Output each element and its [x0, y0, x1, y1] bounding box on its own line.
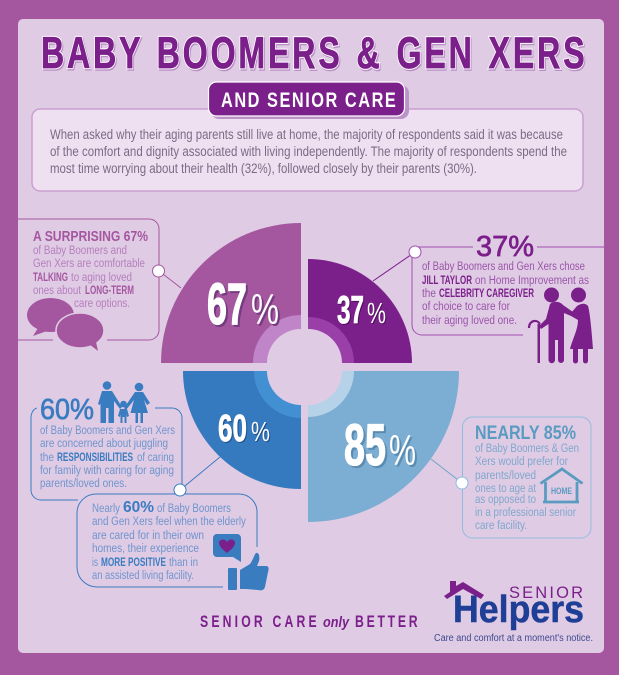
tagline — [200, 613, 418, 632]
icon: heart chat bubble — [213, 534, 241, 562]
icon: home: HOME — [551, 486, 572, 496]
subtitle pill — [208, 82, 409, 119]
chart: quarter pie — [161, 223, 459, 522]
callout: 60% more positive: is — [92, 555, 98, 569]
callout: 60% more positive: of Baby Boomers — [157, 501, 231, 515]
icon: speech bubbles — [27, 298, 104, 351]
segment: 60%: % — [251, 416, 270, 447]
icon: home — [540, 469, 582, 502]
callout: 60% responsibilities: RESPONSIBILITIES — [57, 450, 133, 464]
callout: 85% age at home: parents/loved — [475, 468, 536, 482]
callout: 37% celebrity caregiver — [373, 231, 604, 364]
callout: 60% more positive: homes, their experience — [92, 541, 199, 555]
segment: 37%: % — [368, 299, 387, 331]
callout: 60% more positive: MORE POSITIVE — [101, 555, 166, 569]
callout: 67% talking: care options. — [74, 296, 130, 310]
callout: 60% responsibilities: the — [40, 450, 54, 464]
callout: 60% responsibilities: 60% — [40, 394, 94, 426]
segment: 60%: 60 — [218, 408, 247, 450]
callout: 60% responsibilities: for family with caring for aging — [40, 463, 174, 477]
segment: 60%: 60 — [219, 409, 248, 451]
segment: 67%: 67 — [209, 274, 249, 339]
title: BABY BOOMERS & GEN XERS — [42, 30, 586, 80]
segment: 37%: 37 — [337, 289, 364, 332]
logo: Senior Helpers: SENIOR — [509, 584, 583, 602]
icon: elderly couple with cane — [529, 288, 593, 364]
logo: Senior Helpers: Helpers — [453, 589, 584, 631]
callout: 60% more positive: an assisted living facility. — [92, 568, 194, 582]
callout: 85% age at home: ones to age at — [475, 481, 536, 495]
callout: 60% more positive: Nearly — [92, 501, 121, 515]
logo: Senior Helpers: Care and comfort at a moment's notice. — [434, 633, 593, 644]
callout: 60% more positive: are cared for in their own — [92, 528, 204, 542]
callout: 60% responsibilities: of caring — [137, 450, 174, 464]
callout: 67% talking: A SURPRISING 67% — [33, 229, 148, 245]
icon: thumbs up — [228, 553, 269, 590]
callout: 85% age at home: in a professional senior — [475, 505, 576, 519]
icon: family — [98, 381, 150, 423]
callout: 67% talking: TALKING — [33, 270, 68, 284]
callout: 37% celebrity caregiver: their aging loved one. — [422, 313, 517, 327]
segment: 67%: % — [253, 288, 281, 336]
callout: 85% age at home: Xers would prefer for — [475, 454, 568, 468]
segment: 60% — [183, 371, 301, 489]
segment: 85%: 85 — [344, 413, 386, 478]
callout: 85% age at home: care facility. — [475, 518, 527, 532]
callout: 37% celebrity caregiver: on Home Improvement as — [475, 273, 589, 287]
callout: 67% talking: of Baby Boomers and — [33, 243, 127, 257]
tagline: only — [323, 614, 350, 631]
segment: 85%: 85 — [346, 415, 388, 480]
logo: Senior Helpers — [434, 581, 593, 644]
callout: 37% celebrity caregiver: the — [422, 286, 436, 300]
panel: intro text box — [32, 109, 583, 191]
callout: 67% talking: Gen Xers are comfortable — [33, 256, 145, 270]
callout: 60% responsibilities: parents/loved ones. — [40, 476, 127, 490]
callout: 37% celebrity caregiver: CELEBRITY CAREGIVER — [439, 286, 534, 300]
callout: 60% responsibilities — [31, 381, 182, 500]
segment: 37% — [308, 259, 412, 363]
segment: 60%: % — [252, 417, 271, 448]
segment: 67%: 67 — [207, 272, 247, 337]
callout: 85% age at home: as opposed to — [475, 492, 536, 506]
panel: intro text box: most time worrying about their health (32%), followed closely by their parents (30%). — [50, 161, 477, 176]
segment: 37%: 37 — [338, 290, 365, 333]
segment: 67%: % — [251, 286, 279, 334]
callout: 67% talking — [18, 219, 181, 351]
callout: 67% talking: ones about — [33, 283, 81, 297]
tagline: BETTER — [355, 613, 418, 632]
callout: 67% talking: LONG-TERM — [85, 283, 134, 297]
segment: 85%: % — [389, 427, 416, 475]
callout: 67% talking: to aging loved — [71, 270, 132, 284]
subtitle pill: AND SENIOR CARE — [221, 89, 396, 113]
callout: 60% more positive: 60% — [123, 499, 154, 516]
callout: 37% celebrity caregiver: of choice to care for — [422, 299, 510, 313]
callout: 60% more positive: than in — [169, 555, 198, 569]
callout: 85% age at home: of Baby Boomers & Gen — [475, 441, 579, 455]
icon: logo roof — [444, 581, 484, 599]
callout: 60% more positive: and Gen Xers feel when the elderly — [92, 514, 247, 528]
callout: 60% responsibilities: are concerned about juggling — [40, 436, 168, 450]
callout: 37% celebrity caregiver: 37% — [476, 231, 534, 263]
segment: 67% — [161, 223, 301, 363]
tagline: SENIOR CARE — [200, 613, 317, 632]
callout: 60% responsibilities: of Baby Boomers and Gen Xers — [40, 423, 175, 437]
callout: 60% more positive — [77, 457, 269, 590]
title: BABY BOOMERS & GEN XERS — [41, 29, 585, 78]
title: BABY BOOMERS & GEN XERS — [41, 29, 585, 78]
callout: 85% age at home — [431, 417, 591, 538]
segment: 85%: % — [391, 429, 418, 477]
callout: 37% celebrity caregiver: JILL TAYLOR — [422, 273, 472, 287]
segment: 37%: % — [367, 298, 386, 330]
callout: 85% age at home: NEARLY 85% — [475, 423, 576, 444]
segment: 85% — [308, 371, 459, 522]
